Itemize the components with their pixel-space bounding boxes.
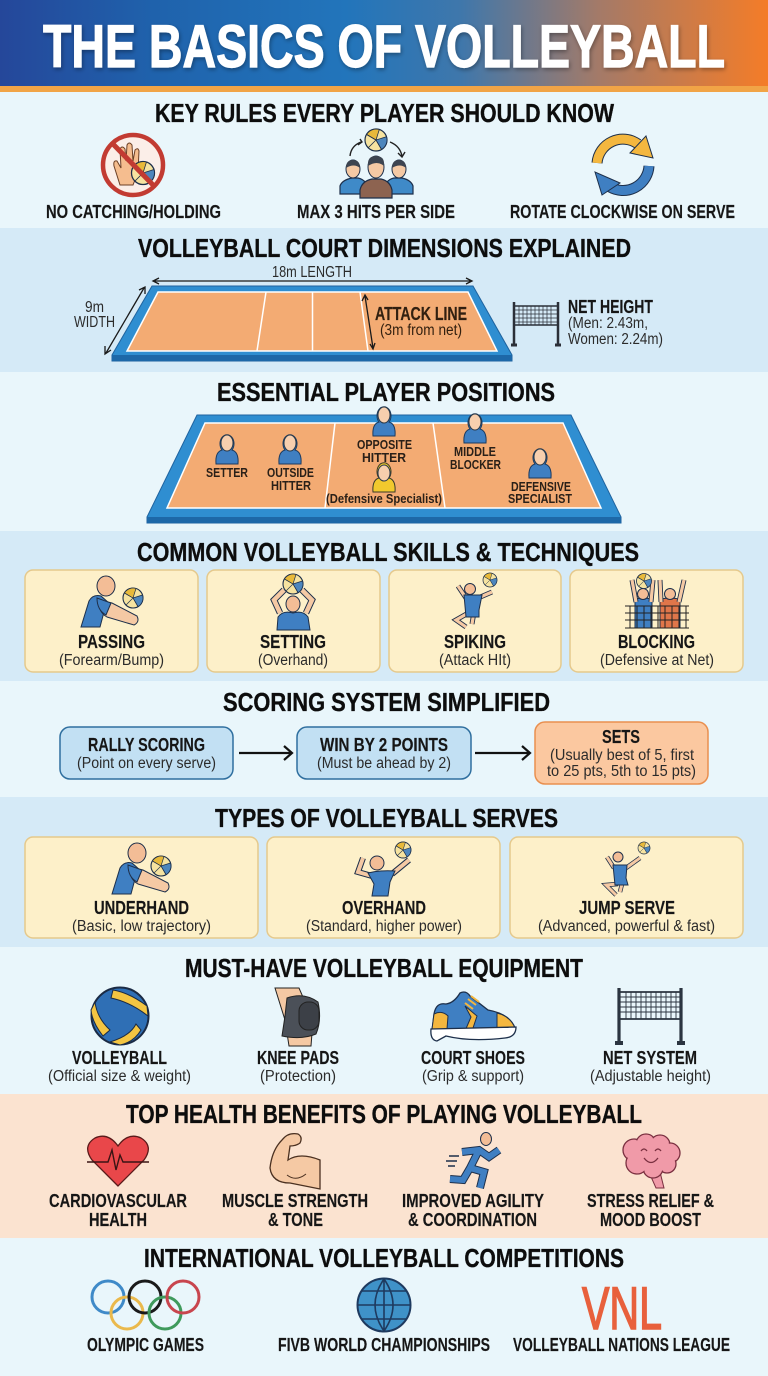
item: net system [590, 988, 711, 1085]
item: court shoes: (Grip & support) [422, 1068, 524, 1085]
item: volleyball [48, 988, 191, 1085]
label: length: 18m LENGTH [272, 264, 352, 281]
card: underhand: (Basic, low trajectory) [72, 918, 211, 935]
card: blocking [570, 570, 743, 672]
arrow [239, 746, 292, 760]
item: agility [402, 1132, 544, 1230]
card: spiking: SPIKING [444, 632, 506, 652]
label: three hits: MAX 3 HITS PER SIDE [297, 202, 455, 222]
item: net system: NET SYSTEM [603, 1048, 697, 1068]
card: setting: SETTING [260, 632, 326, 652]
icon: no catching [103, 135, 163, 195]
item: court shoes: COURT SHOES [421, 1048, 525, 1068]
item: cardiovascular [49, 1136, 187, 1230]
item: olympic games [87, 1281, 204, 1355]
card: underhand: UNDERHAND [94, 898, 189, 918]
court diagram [112, 286, 512, 361]
card: jump serve: (Advanced, powerful & fast) [538, 918, 715, 935]
panel: key rules [0, 92, 768, 228]
icon: net [511, 302, 561, 345]
box: win by 2: (Must be ahead by 2) [317, 755, 451, 772]
player: outside hitter: OUTSIDE [267, 465, 314, 480]
heading: equipment: MUST-HAVE VOLLEYBALL EQUIPMENT [185, 953, 583, 983]
card: spiking [389, 570, 561, 672]
panel: health benefits [0, 1094, 768, 1238]
label: net height: (Men: 2.43m, [568, 315, 648, 332]
player: setter: SETTER [206, 465, 248, 480]
card: spiking: (Attack HIt) [439, 652, 511, 669]
card: setting [207, 570, 380, 672]
label: net height [568, 297, 663, 348]
card: blocking: (Defensive at Net) [600, 652, 714, 669]
arrow: length [153, 278, 472, 284]
card: blocking: BLOCKING [618, 632, 695, 652]
label: width: WIDTH [74, 314, 115, 331]
position court [147, 415, 621, 523]
player: libero: (Defensive Specialist) [326, 491, 442, 506]
item: stress relief: MOOD BOOST [600, 1210, 701, 1230]
item: cardiovascular: CARDIOVASCULAR [49, 1191, 187, 1211]
player: outside hitter: HITTER [271, 478, 312, 493]
item: world championships [278, 1278, 490, 1355]
player: defensive specialist: DEFENSIVE [511, 479, 571, 494]
arrow: width [105, 287, 145, 354]
card: setting: (Overhand) [258, 652, 328, 669]
player: middle blocker: MIDDLE [454, 444, 496, 459]
item: net system: (Adjustable height) [590, 1068, 711, 1085]
card: passing: PASSING [78, 632, 145, 652]
card: passing [25, 570, 198, 672]
item: world championships: FIVB WORLD CHAMPIONSHIPS [278, 1335, 490, 1355]
heading: competitions: INTERNATIONAL VOLLEYBALL COMPETITIONS [144, 1243, 624, 1273]
label: width [74, 299, 115, 331]
player: outside hitter [267, 435, 314, 493]
item: knee pads: (Protection) [260, 1068, 336, 1085]
panel: equipment [0, 947, 768, 1094]
panel: competitions [0, 1238, 768, 1376]
player: opposite hitter: HITTER [362, 450, 407, 465]
item: stress relief [587, 1134, 714, 1230]
item: knee pads [257, 988, 339, 1085]
item: agility: IMPROVED AGILITY [402, 1191, 544, 1211]
item: knee pads: KNEE PADS [257, 1048, 339, 1068]
item: muscle: MUSCLE STRENGTH [222, 1191, 368, 1211]
label: net height: NET HEIGHT [568, 297, 653, 317]
box: sets: SETS [602, 727, 640, 747]
card: jump serve [510, 837, 743, 938]
box: rally scoring: RALLY SCORING [88, 735, 205, 755]
card: jump serve: JUMP SERVE [579, 898, 675, 918]
box: rally scoring [60, 727, 233, 779]
heading: serves: TYPES OF VOLLEYBALL SERVES [215, 803, 558, 833]
player: setter [206, 435, 248, 480]
item: stress relief: STRESS RELIEF & [587, 1191, 714, 1211]
item: volleyball: (Official size & weight) [48, 1068, 191, 1085]
heading: key rules: KEY RULES EVERY PLAYER SHOULD KNOW [155, 98, 614, 128]
panel: skills [0, 531, 768, 681]
label: attack line [375, 304, 467, 339]
item: cardiovascular: HEALTH [89, 1210, 147, 1230]
label: attack line: ATTACK LINE [375, 304, 467, 324]
heading: health: TOP HEALTH BENEFITS OF PLAYING VOLLEYBALL [126, 1099, 642, 1129]
card: passing: (Forearm/Bump) [59, 652, 164, 669]
box: sets [535, 722, 708, 784]
player: opposite hitter: OPPOSITE [357, 437, 412, 452]
icon: three hits [340, 129, 413, 198]
heading: skills: COMMON VOLLEYBALL SKILLS & TECHNIQUES [137, 537, 639, 567]
item: vnl [513, 1275, 730, 1355]
label: width: 9m [85, 299, 104, 316]
card: overhand [267, 837, 500, 938]
heading: scoring: SCORING SYSTEM SIMPLIFIED [223, 687, 550, 717]
arrow: attack line [362, 295, 375, 349]
item: vnl: VNL [582, 1275, 662, 1342]
card: overhand: OVERHAND [342, 898, 426, 918]
heading: positions: ESSENTIAL PLAYER POSITIONS [217, 377, 555, 407]
player: middle blocker: BLOCKER [450, 457, 501, 472]
heading: court dimensions: VOLLEYBALL COURT DIMENSIONS EXPLAINED [138, 233, 631, 263]
box: win by 2 [297, 727, 471, 779]
icon: rotate arrows [595, 136, 653, 195]
box: sets: (Usually best of 5, first [550, 747, 695, 764]
panel: serves [0, 797, 768, 947]
box: win by 2: WIN BY 2 POINTS [320, 735, 448, 755]
panel: player positions [0, 372, 768, 531]
panel: scoring [0, 681, 768, 797]
player: middle blocker [450, 414, 501, 472]
title banner [0, 0, 768, 92]
card: overhand: (Standard, higher power) [306, 918, 462, 935]
label: attack line: (3m from net) [380, 322, 462, 339]
player: defensive specialist: SPECIALIST [508, 491, 572, 506]
item: muscle: & TONE [268, 1210, 323, 1230]
label: net height: Women: 2.24m) [568, 331, 663, 348]
arrow [475, 746, 530, 760]
item: court shoes [421, 992, 525, 1085]
player: defensive specialist [508, 449, 572, 506]
card: underhand [25, 837, 258, 938]
label: no catching: NO CATCHING/HOLDING [46, 202, 221, 222]
box: rally scoring: (Point on every serve) [77, 755, 216, 772]
item: volleyball: VOLLEYBALL [72, 1048, 167, 1068]
panel: court dimensions [0, 228, 768, 372]
item: olympic games: OLYMPIC GAMES [87, 1335, 204, 1355]
player: opposite hitter [357, 407, 412, 465]
box: sets: to 25 pts, 5th to 15 pts) [547, 763, 696, 780]
item: agility: & COORDINATION [408, 1210, 537, 1230]
item: muscle [222, 1134, 368, 1230]
player: libero [326, 463, 442, 506]
